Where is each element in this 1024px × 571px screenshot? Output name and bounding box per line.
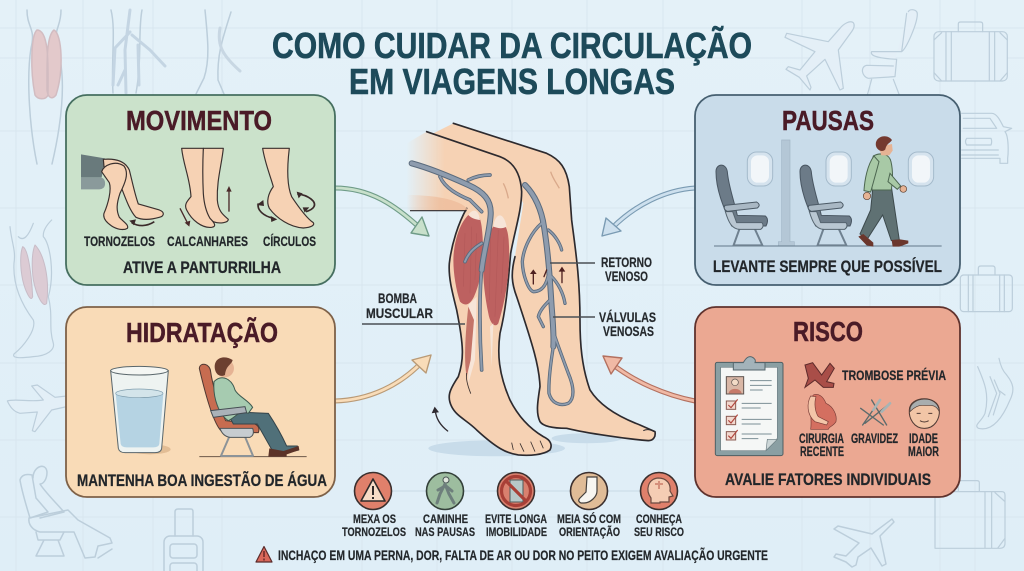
walking person (858, 136, 908, 247)
arrow: risco to legs (603, 356, 695, 401)
background icon: small suitcase (960, 266, 1012, 312)
heading: pausas: PAUSAS (782, 105, 874, 136)
caption: levante sempre que possivel: LEVANTE SEMPRE QUE POSSÍVEL (713, 257, 942, 276)
icon: heel raises (180, 148, 232, 227)
background icon: suitcase top right (934, 22, 1007, 81)
label: cirurgia recente: RECENTE (800, 444, 844, 459)
icon: foot circles (257, 148, 314, 228)
label: cirurgia recente: CIRURGIA (799, 431, 844, 446)
label: gravidez: GRAVIDEZ (851, 431, 898, 446)
icon: crossed vein thrombosis (805, 363, 834, 387)
arrow: movimento to legs (335, 188, 429, 236)
tip: meia so com orientacao: ORIENTAÇÃO (559, 524, 620, 539)
label: circulos: CÍRCULOS (263, 234, 316, 249)
icon: seated passenger (199, 357, 307, 457)
background icon: leg outline with vein (196, 10, 240, 94)
back leg veins (522, 185, 573, 405)
tip: caminhe nas pausas: CAMINHE (423, 512, 468, 526)
label: valvulas venosas: VÁLVULAS (599, 310, 656, 325)
title (272, 24, 752, 102)
tip: evite longa imobilidade (485, 472, 547, 539)
label: bomba muscular: MUSCULAR (366, 306, 433, 321)
label: retorno venoso (550, 255, 652, 284)
icon: surgical tools (861, 400, 890, 425)
tip: mexa os tornozelos (342, 472, 406, 539)
label: calcanhares: CALCANHARES (167, 234, 248, 249)
caption: mantenha boa ingestao de agua: MANTENHA BOA INGESTÃO DE ÁGUA (77, 470, 327, 490)
label: idade maior: IDADE (909, 431, 938, 446)
calf muscles (453, 211, 509, 383)
arrow: pausas to legs (602, 188, 695, 236)
tip: meia so com orientacao (557, 472, 621, 539)
tip: mexa os tornozelos: TORNOZELOS (342, 525, 406, 539)
icon: elderly face (909, 399, 939, 428)
background icon: seated woman (20, 466, 112, 558)
caption: avalie fatores individuais: AVALIE FATORES INDIVIDUAIS (725, 470, 931, 489)
label: retorno venoso: RETORNO (601, 255, 652, 270)
warning line: INCHAÇO EM UMA PERNA, DOR, FALTA DE AR OU DOR NO PEITO EXIGEM AVALIAÇÃO URGENTE (278, 548, 768, 563)
background icon: trolley suitcase (164, 509, 203, 571)
central illustration: legs (407, 123, 655, 456)
icon: ankle exercise (81, 154, 163, 229)
tip: meia so com orientacao: MEIA SÓ COM (557, 511, 621, 526)
label: cirurgia recente (799, 431, 844, 459)
arrow: hidratacao to legs (335, 355, 431, 401)
background icon: airplane bottom right (834, 519, 894, 567)
panel: movimento (66, 95, 335, 285)
label: idade maior (908, 431, 939, 459)
background icon: airplane seat (862, 10, 917, 95)
title: COMO CUIDAR DA CIRCULAÇÃO (272, 24, 752, 66)
title: EM VIAGENS LONGAS (349, 61, 675, 102)
background icon: airplane left side (7, 385, 67, 432)
heading: risco: RISCO (793, 316, 863, 347)
tip: conheca seu risco (634, 472, 684, 539)
heading: movimento: MOVIMENTO (126, 105, 272, 136)
seat one (716, 165, 768, 246)
background icon: car (962, 113, 1012, 163)
caption: ative a panturrilha: ATIVE A PANTURRILHA (123, 258, 281, 277)
label: idade maior: MAIOR (908, 444, 939, 459)
tip: mexa os tornozelos: MEXA OS (353, 512, 396, 526)
background icon: calf left side (10, 220, 54, 358)
background icon: airplane top right (785, 22, 854, 90)
back leg (433, 123, 655, 441)
label: bomba muscular (362, 291, 465, 324)
front leg veins (412, 163, 491, 431)
label: bomba muscular: BOMBA (378, 291, 417, 306)
background icon: foot bones (977, 358, 1013, 429)
pillar (778, 140, 794, 246)
tip: evite longa imobilidade: EVITE LONGA (485, 512, 547, 526)
windows (747, 152, 934, 186)
background icon: large suitcase bottom right (935, 481, 1005, 548)
label: tornozelos: TORNOZELOS (84, 234, 155, 249)
label: retorno venoso: VENOSO (605, 269, 648, 284)
illustration: cabin (714, 136, 942, 247)
label: valvulas venosas (553, 310, 656, 339)
panel: risco (695, 307, 960, 497)
background icon: calf muscles (27, 10, 62, 164)
label: valvulas venosas: VENOSAS (603, 324, 654, 339)
panel: pausas (695, 95, 960, 285)
label: trombose previa: TROMBOSE PRÉVIA (842, 368, 946, 383)
tip: conheca seu risco: SEU RISCO (634, 525, 684, 539)
heading: hidratacao: HIDRATAÇÃO (126, 317, 278, 348)
tip: evite longa imobilidade: IMOBILIDADE (486, 525, 547, 539)
icon: glass of water (111, 366, 171, 454)
front leg (407, 132, 551, 455)
tip: conheca seu risco: CONHEÇA (636, 512, 682, 526)
panel: hidratacao (66, 307, 335, 497)
seat two (800, 165, 851, 246)
background icon: leg veins (111, 10, 165, 93)
icon: pregnant woman (808, 394, 836, 429)
icon: clipboard (715, 357, 783, 456)
tip: caminhe nas pausas (415, 472, 475, 539)
warning line (256, 546, 768, 563)
tip: caminhe nas pausas: NAS PAUSAS (415, 525, 475, 539)
